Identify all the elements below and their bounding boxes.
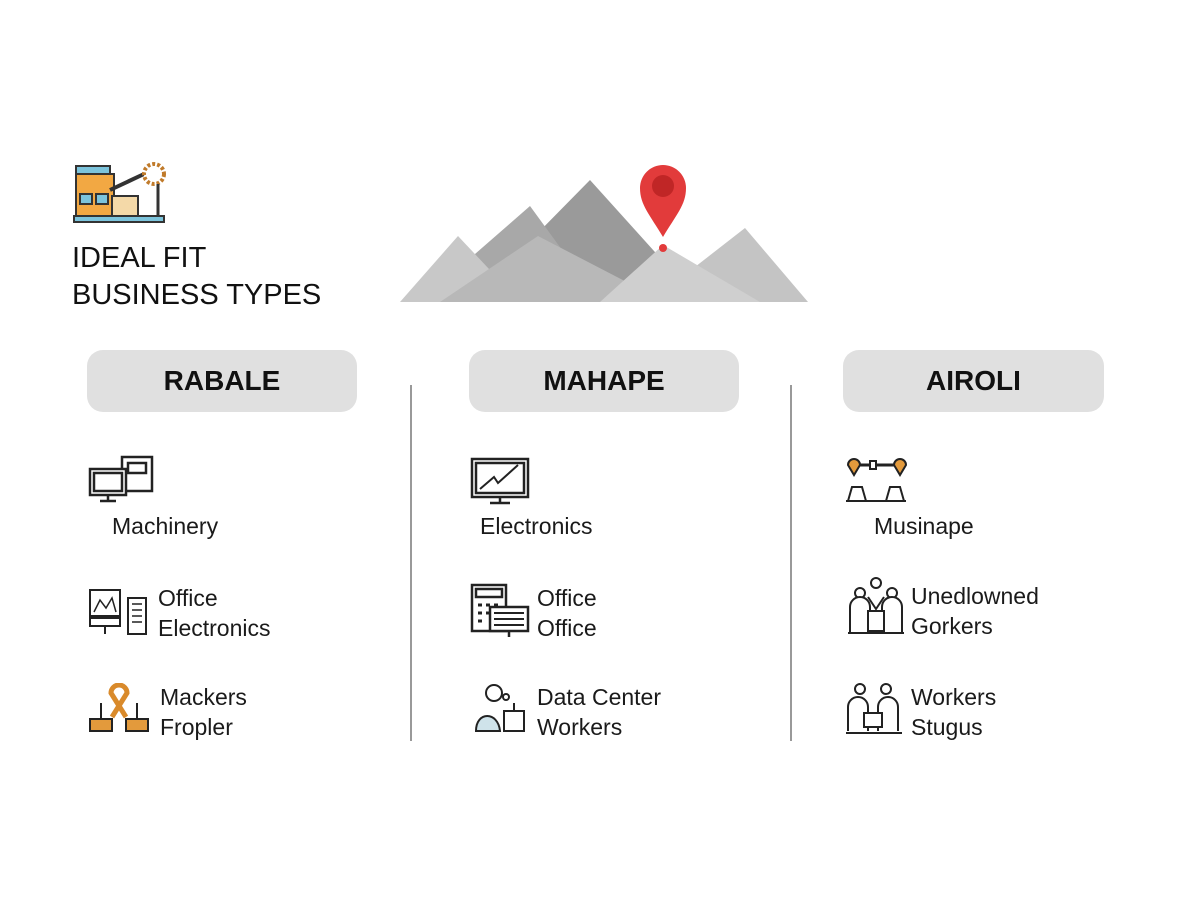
text: Mackers Fropler: Fropler — [160, 714, 233, 740]
icon: data center worker — [475, 684, 525, 732]
text: Workers Stugus: Workers — [911, 684, 996, 710]
text: Office Electronics — [158, 585, 270, 641]
text: Workers Stugus — [911, 684, 996, 740]
text: Unedlowned Gorkers: Unedlowned — [911, 583, 1039, 609]
text: Unedlowned Gorkers: Gorkers — [911, 613, 993, 639]
header: Mahape — [469, 350, 739, 412]
panel: Rabale — [88, 456, 270, 740]
title: BUSINESS TYPES — [72, 279, 321, 311]
text: Office Electronics: Office — [158, 585, 218, 611]
text: Office Office — [537, 585, 597, 641]
text: Office Office: Office — [537, 615, 597, 641]
text: Mackers Fropler: Mackers — [160, 684, 247, 710]
text: Electronics: Electronics — [480, 513, 592, 539]
header: Airoli: AIROLI — [926, 365, 1021, 396]
text: Workers Stugus: Stugus — [911, 714, 983, 740]
panel: Airoli — [846, 458, 1039, 740]
text: Office Office: Office — [537, 585, 597, 611]
icon: office devices — [470, 584, 530, 637]
icon: makers — [89, 683, 149, 732]
text: Data Center Workers: Workers — [537, 714, 622, 740]
location pin — [640, 165, 686, 252]
text: Musinape: Musinape — [874, 513, 974, 539]
header: Rabale — [87, 350, 357, 412]
icon: robotic arms — [846, 458, 907, 502]
panel: Mahape — [470, 458, 661, 740]
text: Mackers Fropler — [160, 684, 247, 740]
icon: workers — [846, 683, 902, 734]
icon: office electronics — [89, 589, 147, 635]
header: Rabale: RABALE — [164, 365, 280, 396]
title — [72, 242, 321, 311]
icon: monitor chart — [470, 458, 530, 504]
text: Machinery: Machinery — [112, 513, 218, 539]
icon: computers — [88, 456, 154, 502]
text: Unedlowned Gorkers — [911, 583, 1039, 639]
text: Data Center Workers: Data Center — [537, 684, 661, 710]
icon: factory — [73, 162, 166, 223]
icon: group workers — [848, 577, 904, 634]
text: Data Center Workers — [537, 684, 661, 740]
title: IDEAL FIT — [72, 242, 206, 274]
header: Airoli — [843, 350, 1104, 412]
header: Mahape: MAHAPE — [543, 365, 665, 396]
text: Office Electronics: Electronics — [158, 615, 270, 641]
mountain illustration with location pin — [400, 165, 808, 302]
